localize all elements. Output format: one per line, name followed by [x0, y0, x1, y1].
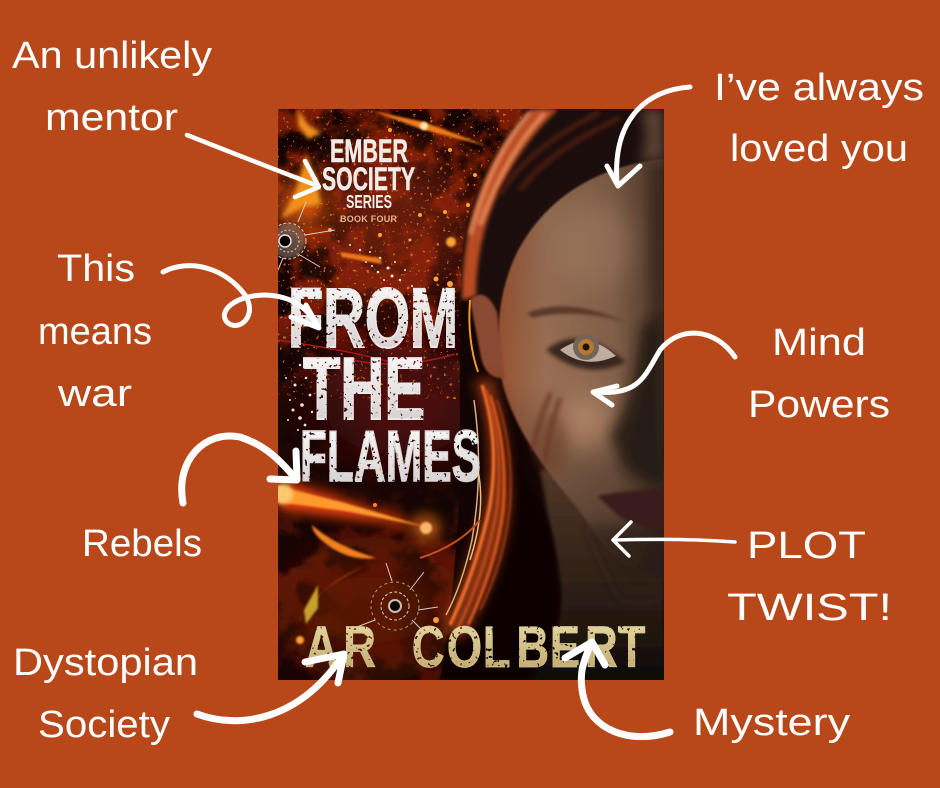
- arrow: mystery: [565, 642, 670, 737]
- label: Rebels: Rebels: [82, 523, 202, 565]
- chin shadow: [584, 522, 652, 576]
- series title: [322, 133, 415, 224]
- label: I've always loved you: [714, 67, 924, 170]
- series title: SERIES: [346, 192, 392, 212]
- nose and right-side shadow: [610, 315, 664, 490]
- book title: FROM: [288, 271, 458, 365]
- label: This means war: [38, 248, 152, 415]
- label: Mind Powers: Mind: [772, 322, 866, 364]
- series title: SOCIETY: [322, 161, 415, 197]
- label: PLOT TWIST!: TWIST!: [727, 587, 892, 629]
- label: This means war: This: [57, 248, 135, 290]
- label: Mind Powers: [748, 322, 890, 426]
- arrow: dystopian society: [197, 654, 344, 721]
- ear: [470, 295, 505, 378]
- arrow: rebels: [182, 436, 297, 503]
- label: Mind Powers: Powers: [748, 384, 890, 426]
- arrow: this means war: [163, 266, 319, 328]
- author name: COLBERT: [412, 616, 646, 680]
- book title: [291, 287, 480, 482]
- cover background: fire field: [270, 109, 664, 680]
- label: Mystery: Mystery: [693, 702, 850, 744]
- eye: [546, 334, 626, 370]
- label: Dystopian Society: Society: [38, 704, 170, 746]
- label: Dystopian Society: [13, 642, 198, 746]
- neck: [534, 468, 664, 680]
- label: An unlikely mentor: [12, 35, 212, 139]
- glowing particles: [296, 128, 477, 644]
- mouth: [597, 489, 664, 528]
- book title: THE: [303, 339, 425, 438]
- arrow: plot twist: [613, 522, 735, 556]
- arrow: mentor: [187, 135, 319, 197]
- long orange strands: [442, 378, 510, 640]
- arrow: mind powers: [593, 333, 735, 405]
- hair: [420, 109, 664, 640]
- label: An unlikely mentor: mentor: [45, 97, 178, 139]
- woman's face: [498, 158, 664, 600]
- hair behind neck: [440, 370, 559, 680]
- label: This means war: war: [57, 373, 132, 415]
- label: I've always loved you: I’ve always: [714, 67, 924, 109]
- label: An unlikely mentor: An unlikely: [12, 35, 212, 77]
- author name: [306, 626, 646, 668]
- eyebrow: [527, 306, 626, 322]
- label: Dystopian Society: Dystopian: [13, 642, 198, 684]
- white debris dust: [285, 244, 413, 431]
- label: This means war: means: [38, 311, 152, 353]
- arrow: loved you: [607, 87, 690, 186]
- scar: [533, 393, 560, 462]
- series title: BOOK FOUR: [340, 214, 398, 224]
- book title: FLAMES: [300, 417, 481, 497]
- label: I've always loved you: loved you: [730, 128, 908, 170]
- series title: EMBER: [330, 133, 408, 169]
- book cover: [270, 109, 664, 690]
- comets: [273, 111, 487, 624]
- author name: AR: [305, 616, 376, 680]
- label: PLOT TWIST!: PLOT: [747, 525, 866, 567]
- bullet holes: [270, 202, 438, 632]
- label: PLOT TWIST!: [727, 525, 892, 629]
